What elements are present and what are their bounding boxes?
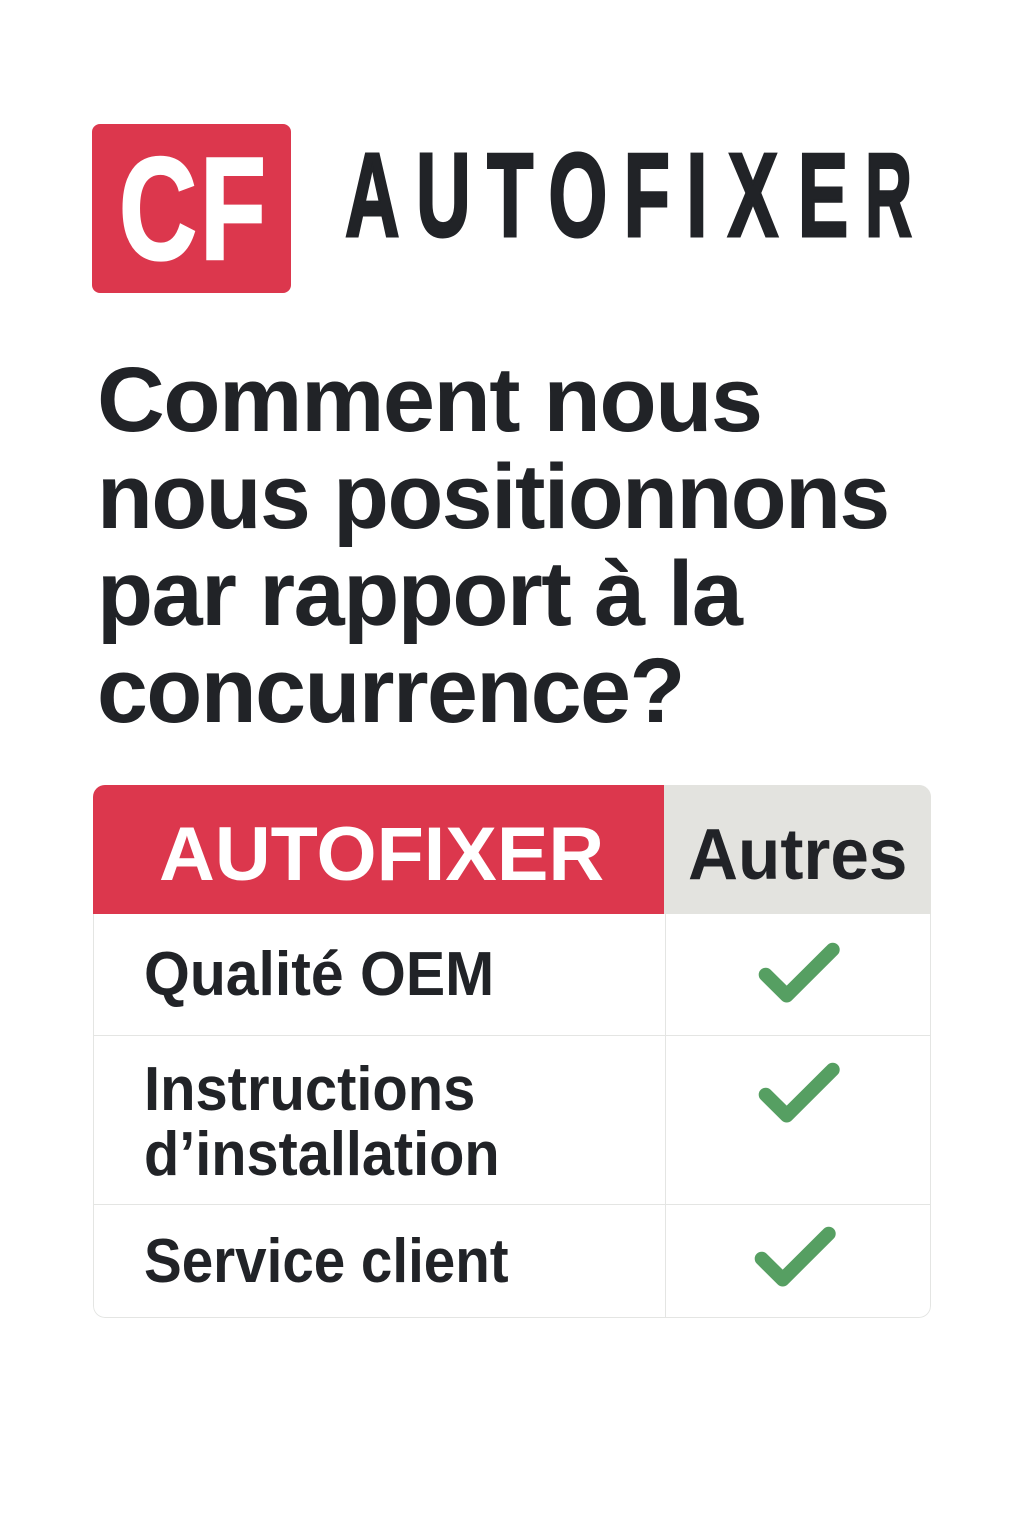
brand name: AUTOFIXE (345, 129, 865, 262)
logo letters CF: CF (119, 127, 269, 290)
title (97, 349, 889, 742)
title: nous positionnons (97, 446, 889, 548)
brand name: R (865, 129, 925, 262)
comparison table (93, 785, 931, 1318)
row label: Qualité OEM: Qualité OEM (144, 940, 494, 1009)
icon: check 2 (758, 1062, 840, 1122)
title: concurrence? (97, 640, 684, 742)
row label: Instructions d'installation (144, 1055, 500, 1189)
header: Autres (664, 785, 931, 914)
header: AUTOFIXER (93, 785, 664, 914)
row label: Service client: Service client (144, 1227, 509, 1296)
logo badge (92, 124, 291, 293)
header text Autres: Autres (688, 815, 907, 895)
icon: check 3 (754, 1226, 836, 1286)
row label: Instructions d'installation: Instructions (144, 1055, 475, 1124)
title: par rapport à la (97, 543, 741, 645)
title: Comment nous (97, 349, 762, 451)
header text AUTOFIXER: AUTOFIXER (159, 812, 604, 897)
row label: Instructions d'installation: d’installation (144, 1120, 500, 1189)
icon: check 1 (758, 942, 840, 1002)
